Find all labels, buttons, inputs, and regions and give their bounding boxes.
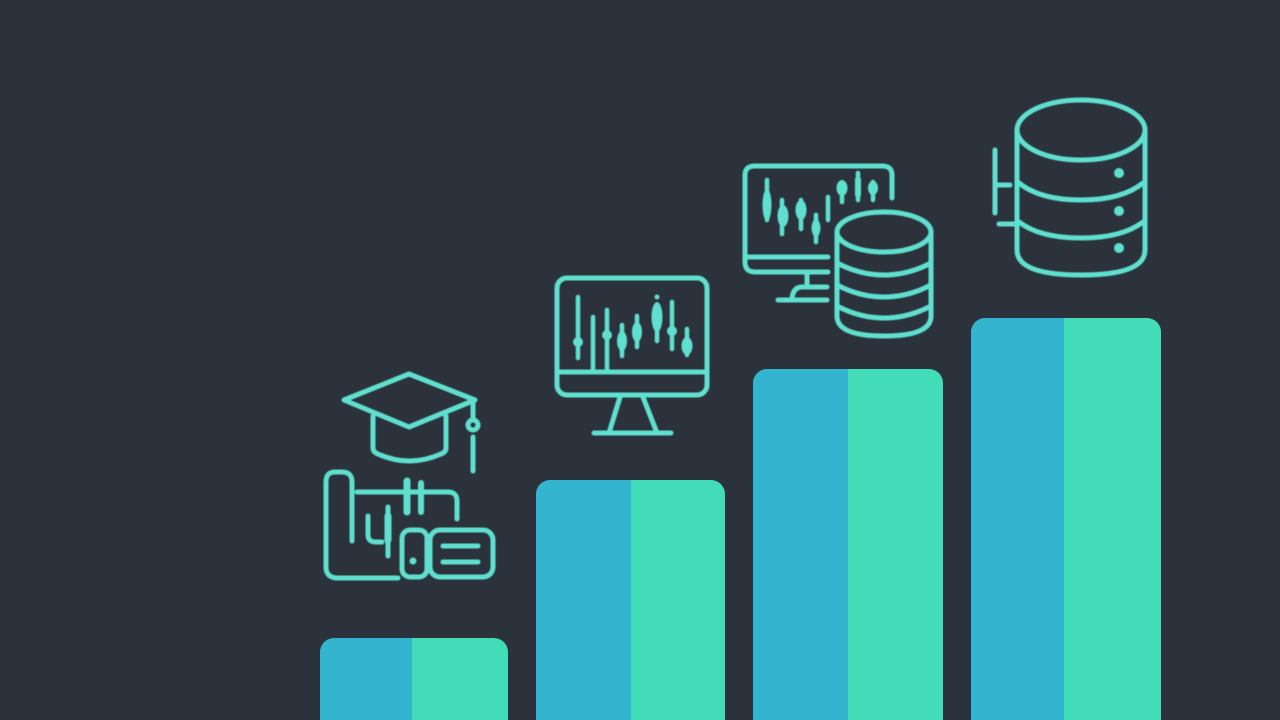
side connector xyxy=(995,150,1017,224)
status dots xyxy=(1114,168,1124,253)
icon: monitor with candlestick chart xyxy=(557,278,707,433)
bar 4 xyxy=(971,318,1161,720)
candlesticks xyxy=(573,294,692,372)
bar 3 xyxy=(753,369,943,720)
candlesticks xyxy=(762,173,878,242)
icon: database server xyxy=(995,100,1145,275)
cylinder xyxy=(1017,100,1145,275)
infographic canvas xyxy=(320,96,1161,720)
icon: graduation cap with chart and device xyxy=(326,374,493,578)
monitor frame and stand xyxy=(557,278,707,433)
icon: monitor with database xyxy=(745,166,931,336)
bar 1 xyxy=(320,638,508,720)
database xyxy=(837,212,931,336)
icon: chart with device xyxy=(326,472,493,578)
monitor xyxy=(745,166,892,300)
icon: graduation cap xyxy=(344,374,478,471)
bar 2 xyxy=(536,480,725,720)
